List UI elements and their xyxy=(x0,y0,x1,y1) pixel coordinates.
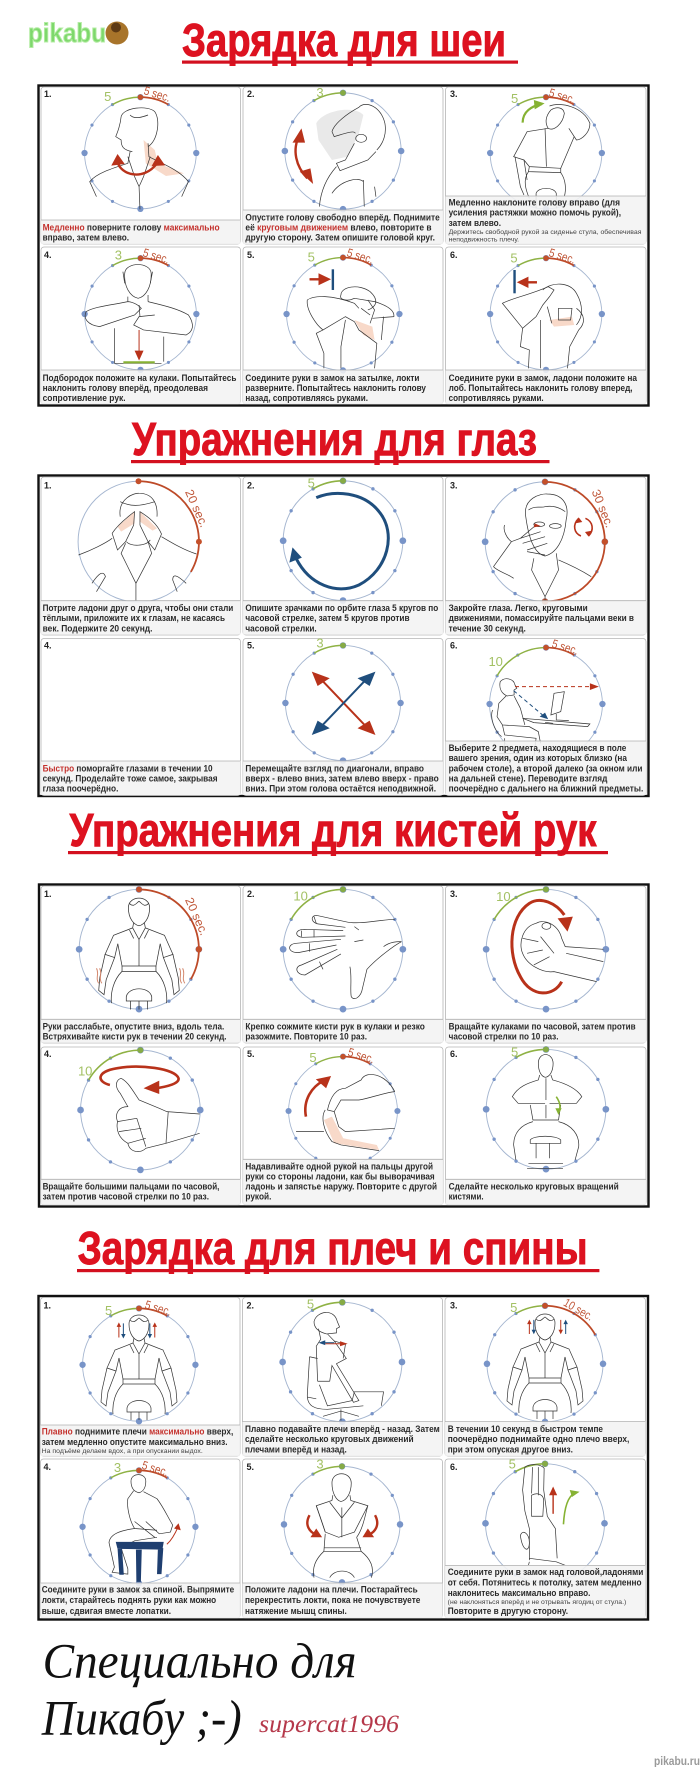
caption: Плавно подавайте плечи вперёд - назад. Затем xyxy=(245,1424,440,1434)
caption: разожмите. Повторите 10 раз. xyxy=(245,1031,367,1041)
figure: hands behind head xyxy=(307,269,394,368)
caption: часовой стрелки по 10 раз. xyxy=(449,1031,558,1041)
figure: seated man xyxy=(507,1314,583,1419)
caption xyxy=(446,1179,646,1205)
caption: натяжение мышц спины. xyxy=(245,1606,347,1616)
panel: eyes 3 xyxy=(446,477,646,635)
caption xyxy=(445,1422,646,1456)
clock ring xyxy=(483,886,609,1013)
number: 2. xyxy=(246,1301,254,1311)
caption: руки со стороны ладони, как бы выворачивая xyxy=(245,1171,435,1181)
caption: на дальней стене). Переводите взгляд xyxy=(449,774,608,784)
caption xyxy=(446,1019,646,1043)
footer text: dedication xyxy=(41,1633,357,1746)
number: 6. xyxy=(450,1049,458,1059)
panel: eyes 1 xyxy=(41,477,240,635)
figure: side seated man xyxy=(307,1312,384,1421)
figure: open hand xyxy=(290,915,401,999)
number: 3. xyxy=(450,889,458,899)
caption: вверх - влево вниз, затем влево вверх - право xyxy=(245,774,439,784)
caption: Выберите 2 предмета, находящиеся в поле xyxy=(449,743,626,753)
clock ring xyxy=(286,1054,400,1168)
number: 6. xyxy=(450,250,458,260)
label: 5: 5 xyxy=(104,89,111,104)
panel: shoulders 1 xyxy=(40,1298,240,1456)
number: 2. xyxy=(247,480,255,490)
clock ring xyxy=(482,1460,608,1586)
caption: движениями, помассируйте пальцами веки в xyxy=(449,613,634,623)
caption: усиления растяжки можно помочь рукой), xyxy=(449,208,621,218)
caption xyxy=(41,761,240,795)
label: 5: 5 xyxy=(510,250,518,266)
label: 5 sec: 5 sec. xyxy=(143,1298,173,1319)
caption xyxy=(243,210,443,244)
label: 3: 3 xyxy=(316,85,324,100)
number: 4. xyxy=(44,250,52,260)
panel: shoulders 5 xyxy=(242,1456,442,1618)
label: 5 sec: 5 sec. xyxy=(346,1045,376,1066)
panel: eyes 5 xyxy=(243,636,443,796)
clock ring xyxy=(487,94,605,212)
label: 10: 10 xyxy=(488,654,503,669)
caption: Держитесь свободной рукой за сиденье стула, обеспечивая xyxy=(449,228,642,236)
caption: Сделайте несколько круговых вращений xyxy=(449,1182,619,1192)
caption: наклонить голову вперёд, преодолевая xyxy=(43,383,208,393)
label: 5 sec: 5 sec. xyxy=(140,1458,170,1479)
clock ring xyxy=(281,1463,403,1586)
label: 5: 5 xyxy=(509,1456,516,1472)
clock ring xyxy=(282,642,404,764)
panel: hands 2 xyxy=(243,886,443,1043)
panel: eyes 2 xyxy=(243,476,443,635)
clock ring xyxy=(283,254,403,374)
caption: неподвижность плечу. xyxy=(449,236,519,244)
footer text: dedication: Пикабу ;-) xyxy=(41,1690,242,1746)
caption: На подъёме делаем вдох, а при опускании выдох. xyxy=(42,1448,203,1455)
figure: palms on forehead xyxy=(502,270,583,368)
label: 3: 3 xyxy=(316,636,324,650)
caption xyxy=(243,601,443,635)
caption: часовой стрелке, затем 5 кругов против xyxy=(245,613,410,623)
caption: Медленно поверните голову максимально xyxy=(43,222,220,232)
panel: neck 1 xyxy=(41,84,240,244)
caption xyxy=(41,1179,240,1205)
label: 5: 5 xyxy=(511,1044,518,1060)
title: shoulders and back: Зарядка для плеч и спины xyxy=(78,1222,588,1274)
caption: сопротивление рук. xyxy=(43,393,126,403)
caption xyxy=(243,1159,443,1205)
caption xyxy=(41,220,240,244)
caption: затем влево. xyxy=(449,218,501,228)
figure: pressing fingers xyxy=(296,1074,395,1151)
figure: shoulder arrows xyxy=(117,1322,157,1339)
figure: diagonal arrows xyxy=(312,672,375,735)
caption: сделайте несколько круговых движений xyxy=(245,1434,414,1444)
caption: Закройте глаза. Легко, круговыми xyxy=(449,603,588,613)
number: 5. xyxy=(247,250,255,260)
number: 5. xyxy=(246,1462,254,1472)
label: 30 sec: 30 sec. xyxy=(589,487,617,530)
caption xyxy=(446,370,646,404)
figure: seated wrist rotation xyxy=(512,1055,582,1168)
signature: supercat1996 xyxy=(259,1711,400,1738)
caption: наклонитесь максимально вправо. xyxy=(448,1588,590,1598)
figure: shoulder arrows xyxy=(527,1320,568,1334)
label: 10: 10 xyxy=(496,889,511,904)
caption xyxy=(445,1565,646,1618)
title: eyes: Упражнения для глаз xyxy=(132,413,537,465)
clock ring xyxy=(487,255,605,373)
panel: hands 5 xyxy=(243,1045,443,1205)
caption: (не наклоняться вперёд и не отрывать ягодиц от стула.) xyxy=(448,1599,626,1606)
label: 5 sec: 5 sec. xyxy=(142,84,172,105)
title: neck: Зарядка для шеи xyxy=(182,14,506,66)
caption: Подбородок положите на кулаки. Попытайтесь xyxy=(43,373,237,383)
figure: massaging eyelids xyxy=(493,494,592,601)
clock ring xyxy=(279,1299,405,1425)
caption: перекрестить локти, пока не почувствуете xyxy=(245,1595,420,1605)
panel: eyes 4 xyxy=(41,638,240,796)
number: 4. xyxy=(44,640,52,650)
number: 6. xyxy=(450,1462,458,1472)
caption: Соедините руки в замок на затылке, локти xyxy=(245,373,419,383)
caption: В течении 10 секунд в быстром темпе xyxy=(448,1424,603,1434)
number: 2. xyxy=(247,889,255,899)
caption xyxy=(243,1019,443,1043)
caption xyxy=(446,601,646,635)
number: 2. xyxy=(247,89,255,99)
figure: crossed elbows xyxy=(307,1474,377,1578)
caption: Положите ладони на плечи. Постарайтесь xyxy=(245,1585,418,1595)
caption: Встряхивайте кисти рук в течении 20 секунд. xyxy=(43,1031,227,1041)
caption: вниз. При этом голова остаётся неподвижной. xyxy=(245,784,436,794)
caption: Опишите зрачками по орбите глаза 5 кругов по xyxy=(245,603,439,613)
caption: затем медленно опустите максимально вниз. xyxy=(42,1437,228,1447)
caption: Медленно наклоните голову вправо (для xyxy=(449,198,620,208)
caption: Перемещайте взгляд по диагонали, вправо xyxy=(245,763,424,773)
label: 5: 5 xyxy=(307,1296,314,1312)
caption: кистями. xyxy=(449,1192,484,1202)
label: 5 sec: 5 sec. xyxy=(547,86,577,107)
caption: плечами вперёд и назад. xyxy=(245,1444,347,1454)
caption xyxy=(446,741,646,795)
caption: поочерёдно поднимайте одно плечо вверх, xyxy=(448,1434,629,1444)
caption: вправо, затем влево. xyxy=(43,233,129,243)
figure: rotating fist xyxy=(512,900,603,993)
clock ring xyxy=(482,478,608,605)
clock ring xyxy=(82,255,199,373)
number: 4. xyxy=(44,1049,52,1059)
panel: shoulders 2 xyxy=(242,1296,442,1456)
figure: circular blue arrow xyxy=(289,493,388,589)
label: 5 sec: 5 sec. xyxy=(345,246,375,267)
caption xyxy=(41,370,240,404)
clock ring xyxy=(484,1303,606,1425)
number: 1. xyxy=(44,89,52,99)
caption: рабочем столе), а второй далеко (за окном или xyxy=(449,763,642,773)
caption: Быстро поморгайте глазами в течении 10 xyxy=(43,763,213,773)
caption: Соедините руки в замок за спиной. Выпрямите xyxy=(42,1585,234,1595)
label: 5 sec: 5 sec. xyxy=(550,637,580,658)
panel: hand exercises xyxy=(39,884,648,1206)
figure: man turning head xyxy=(90,108,188,209)
caption: сопротивляясь руками. xyxy=(449,393,544,403)
panel: shoulders 6 xyxy=(445,1456,646,1618)
caption: выше, сдвигая вместе лопатки. xyxy=(42,1606,171,1616)
label: 20 sec: 20 sec. xyxy=(182,487,211,529)
number: 1. xyxy=(44,889,52,899)
clock ring xyxy=(77,1047,204,1173)
caption: Вращайте большими пальцами по часовой, xyxy=(43,1182,219,1192)
figure: fists under chin xyxy=(85,265,192,363)
caption xyxy=(40,1583,240,1618)
clock ring xyxy=(282,90,404,212)
caption: Повторите в другую сторону. xyxy=(448,1606,568,1616)
caption: Потрите ладони друг о друга, чтобы они стали xyxy=(43,603,233,613)
label: 10: 10 xyxy=(78,1064,92,1078)
caption: Соедините руки в замок, ладони положите на xyxy=(449,373,638,383)
footer text: dedication: Специально для xyxy=(43,1633,357,1689)
clock ring xyxy=(79,1305,199,1424)
caption: лоб. Попытайтесь наклонить голову вперед, xyxy=(449,383,633,393)
caption: ладонь и запястье наружу. Повторите с другой xyxy=(245,1182,437,1192)
caption: Вращайте кулаками по часовой, затем против xyxy=(449,1021,636,1031)
label: 5: 5 xyxy=(105,1303,112,1318)
number: 3. xyxy=(450,89,458,99)
caption: другую сторону. Затем опишите головой круг. xyxy=(245,233,435,243)
clock ring xyxy=(280,477,406,604)
figure: person at desk xyxy=(492,679,599,757)
caption: рукой. xyxy=(245,1192,271,1202)
figure: head tilted with arm xyxy=(514,100,590,208)
clock ring xyxy=(76,886,202,1013)
label: 5: 5 xyxy=(511,91,518,106)
caption: течение 30 секунд. xyxy=(449,624,526,634)
clock ring: thin xyxy=(78,478,202,602)
panel: shoulders 3 xyxy=(445,1295,646,1456)
panel: neck 2 xyxy=(243,85,443,244)
label: 3: 3 xyxy=(115,248,122,262)
label: 5 sec: 5 sec. xyxy=(141,246,171,267)
panel: neck 5 xyxy=(243,246,443,404)
figure: seated man xyxy=(101,1315,177,1420)
panel: neck 3 xyxy=(446,86,646,244)
caption xyxy=(242,1422,442,1456)
caption: Соедините руки в замок над головой,ладонями xyxy=(448,1567,643,1577)
caption: разверните. Попытайтесь наклонить голову xyxy=(245,383,426,393)
caption xyxy=(243,370,443,404)
caption: назад, сопротивляясь руками. xyxy=(245,393,368,403)
label: 5: 5 xyxy=(309,1050,317,1065)
panel: hands 4 xyxy=(41,1047,240,1205)
caption: тёплыми, приложите их к глазам, не касаясь xyxy=(43,613,225,623)
caption: секунд. Проделайте тоже самое, закрывая xyxy=(43,774,218,784)
caption xyxy=(41,601,240,635)
figure: man shaking hands xyxy=(99,898,179,1009)
caption xyxy=(242,1583,442,1618)
caption: вашего зрения, один из которых близко (на xyxy=(449,753,628,763)
panel: hands 3 xyxy=(446,886,646,1043)
panel: hands 1 xyxy=(41,886,240,1043)
caption xyxy=(41,1019,240,1043)
label: 5: 5 xyxy=(510,1300,517,1315)
label: 20 sec: 20 sec. xyxy=(182,895,211,937)
caption: локти, старайтесь поднять руки как можно xyxy=(42,1595,217,1605)
number: 3. xyxy=(450,480,458,490)
title: hands: Упражнения для кистей рук xyxy=(70,804,597,856)
caption xyxy=(446,196,646,244)
panel: shoulders 4 xyxy=(40,1458,240,1618)
caption xyxy=(40,1425,240,1456)
number: 5. xyxy=(247,1049,255,1059)
label: 10: 10 xyxy=(293,888,308,904)
panel: shoulder and back exercises xyxy=(38,1295,648,1620)
figure: arms overhead xyxy=(520,1465,580,1565)
caption: Надавливайте одной рукой на пальцы другой xyxy=(245,1161,433,1171)
caption: поочерёдно с дальнего на ближний предметы. xyxy=(449,784,643,794)
panel: neck 4 xyxy=(41,246,240,404)
label: 10 sec: 10 sec. xyxy=(561,1295,596,1324)
label: 3: 3 xyxy=(114,1460,121,1475)
caption xyxy=(243,761,443,795)
label: 5: 5 xyxy=(308,250,315,264)
caption: Руки расслабьте, опустите вниз, вдоль тела. xyxy=(43,1021,224,1031)
clock ring xyxy=(81,94,199,212)
panel: neck exercises xyxy=(38,84,648,406)
caption: затем против часовой стрелки по 10 раз. xyxy=(43,1192,209,1202)
label: 5 sec: 5 sec. xyxy=(547,246,577,267)
logo: pikabu: pikabu xyxy=(28,18,106,48)
number: 3. xyxy=(450,1301,458,1311)
clock ring xyxy=(486,644,606,764)
caption: глаза поочерёдно. xyxy=(43,784,118,794)
clock ring xyxy=(483,1046,609,1173)
panel: hands 6 xyxy=(446,1044,646,1205)
caption: от себя. Потянитесь к потолку, затем медленно xyxy=(448,1578,642,1588)
caption: век. Подержите 20 секунд. xyxy=(43,624,152,634)
label: 5: 5 xyxy=(308,476,315,490)
figure: palms over eyes xyxy=(79,493,196,601)
figure: thumb rotation xyxy=(101,1067,200,1152)
caption: её круговым движением влево, повторите в xyxy=(245,222,432,232)
label: 3: 3 xyxy=(316,1456,324,1472)
number: 6. xyxy=(450,640,458,650)
panel: neck 6 xyxy=(446,246,646,404)
caption: Плавно поднимите плечи максимально вверх, xyxy=(42,1427,233,1437)
caption: при этом опуская другое вниз. xyxy=(448,1444,573,1454)
number: 1. xyxy=(44,1301,51,1311)
caption: Крепко сожмите кисти рук в кулаки и резко xyxy=(245,1021,425,1031)
panel: eyes 6 xyxy=(446,637,646,796)
figure: shake marks xyxy=(96,968,185,983)
number: 1. xyxy=(44,480,52,490)
figure: head tilted xyxy=(292,104,385,207)
figure: hands clasped behind back on stool xyxy=(109,1475,181,1582)
panel: eye exercises xyxy=(38,476,648,796)
caption: Опустите голову свободно вперёд. Поднимите xyxy=(245,212,440,222)
number: 5. xyxy=(247,640,255,650)
clock ring xyxy=(280,886,406,1013)
number: 4. xyxy=(44,1462,51,1472)
clock ring xyxy=(79,1467,199,1586)
caption: часовой стрелки. xyxy=(245,624,317,634)
